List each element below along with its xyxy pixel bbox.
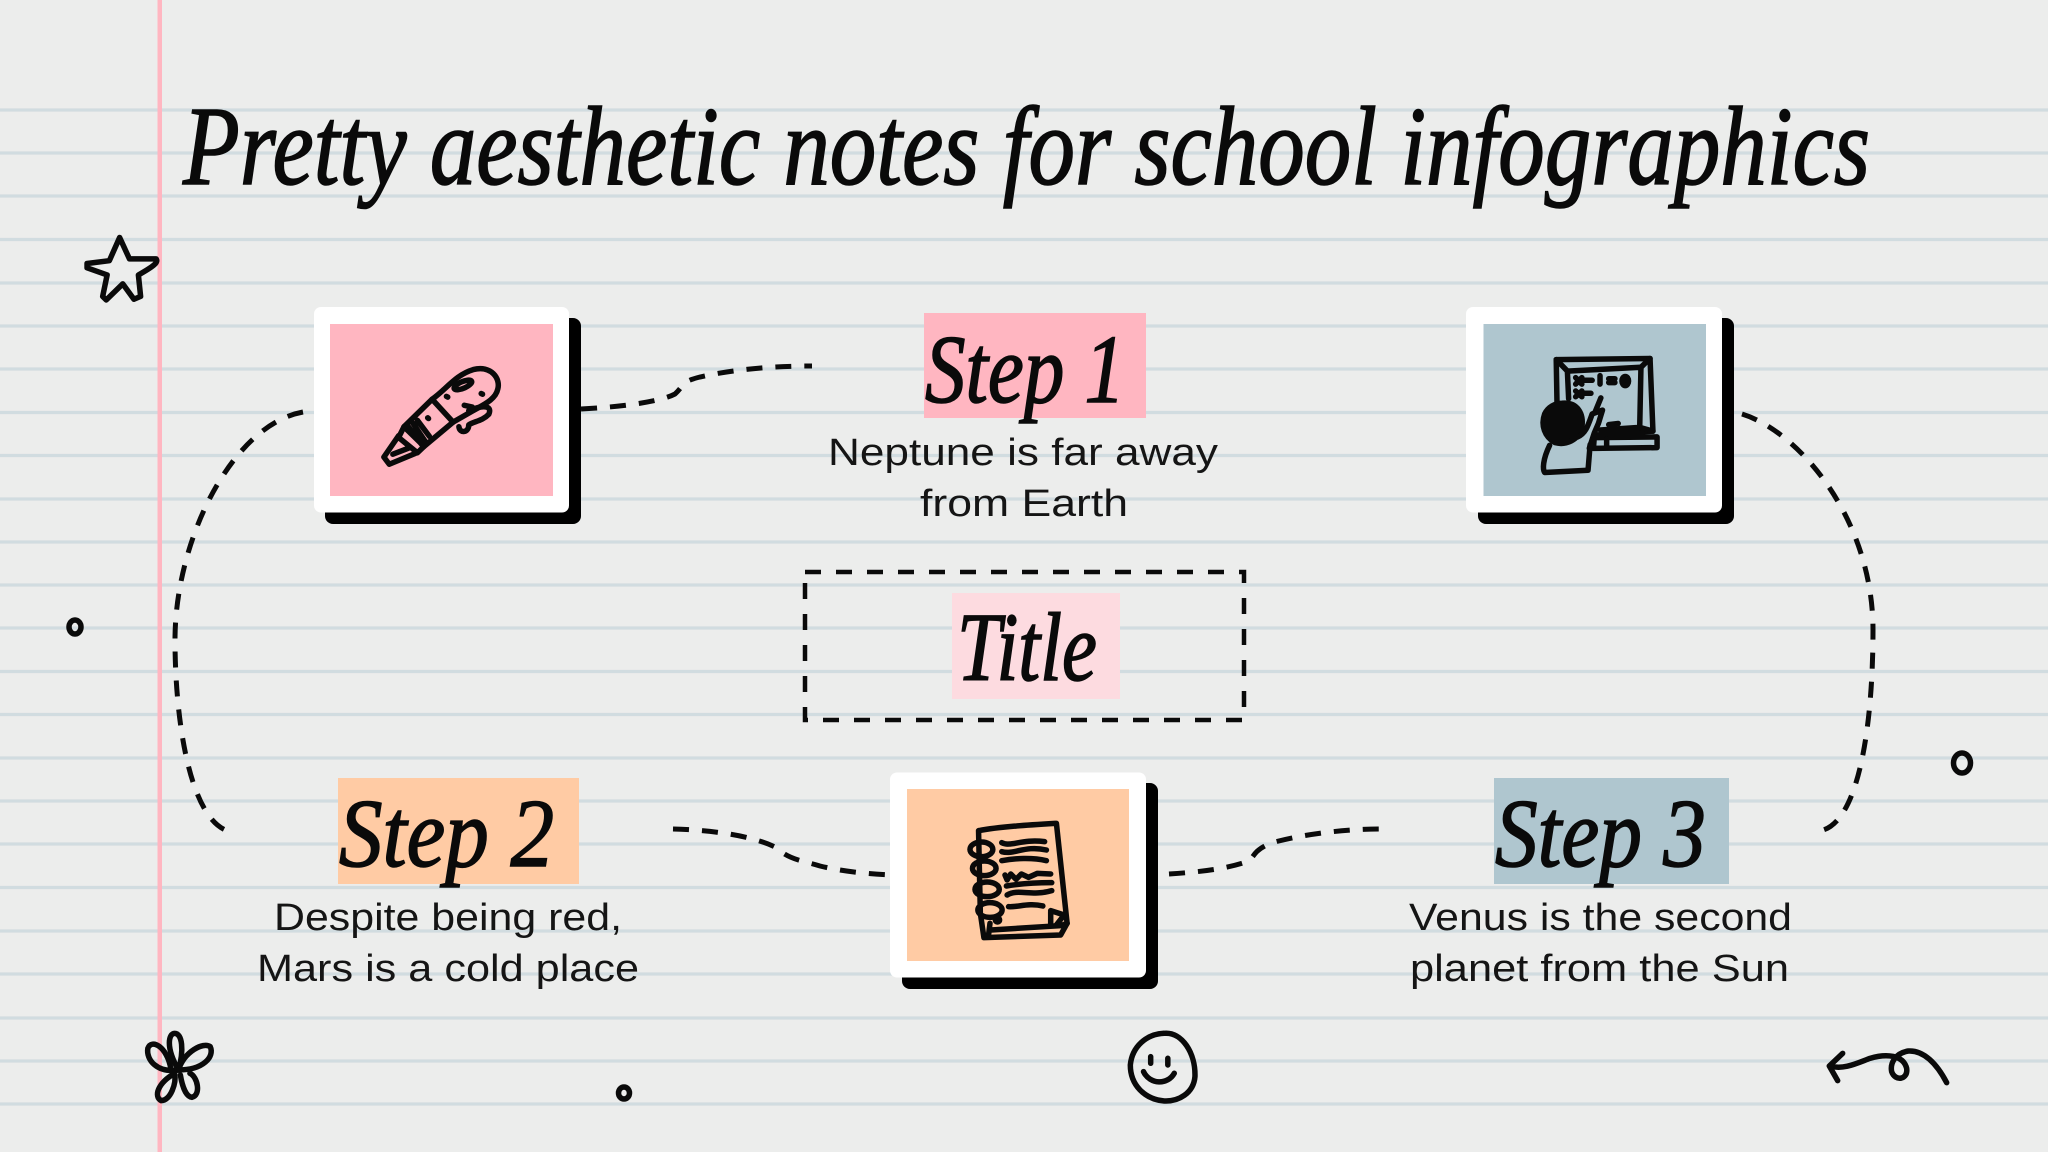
- connector: step 2: [673, 829, 892, 875]
- doodle: bottom circle: [618, 1087, 630, 1099]
- connector: left arc: [175, 412, 303, 832]
- step 2 heading: Step 2: [339, 780, 554, 888]
- center title box: [805, 572, 1244, 720]
- step 1 description: [828, 432, 1218, 525]
- step 1 block: [828, 313, 1218, 525]
- step 2 description: Mars is a cold place: [257, 948, 639, 990]
- step 3 heading: Step 3: [1495, 780, 1706, 888]
- icon: teacher at blackboard: [1543, 358, 1657, 472]
- doodle: smiley: [1130, 1033, 1195, 1101]
- connector: right arc: [1742, 414, 1873, 831]
- step 2 description: Despite being red,: [274, 897, 622, 939]
- card: notebook: [890, 772, 1158, 989]
- step 2 block: [257, 778, 639, 990]
- step 3 description: Venus is the second: [1409, 897, 1792, 939]
- step 1 description: Neptune is far away: [828, 432, 1218, 474]
- icon: notebook: [970, 823, 1067, 938]
- doodle: left circle: [69, 620, 81, 634]
- icon: highlighter: [384, 369, 498, 464]
- doodle: flower: [148, 1033, 211, 1101]
- connector: step 3: [1169, 829, 1382, 874]
- step 1 heading: Step 1: [925, 316, 1125, 424]
- card: highlighter: [314, 307, 581, 524]
- step 2 description: [257, 897, 639, 990]
- card: teacher at blackboard: [1466, 307, 1734, 524]
- doodle: right circle: [1954, 753, 1970, 773]
- step 3 description: [1409, 897, 1792, 990]
- doodle: curly arrow: [1829, 1051, 1947, 1083]
- center title text: Title: [957, 594, 1097, 702]
- connector: step 1: [581, 366, 812, 409]
- doodle: star: [87, 237, 157, 300]
- step 3 block: [1409, 778, 1792, 990]
- step 1 description: from Earth: [920, 483, 1128, 525]
- step 3 description: planet from the Sun: [1410, 948, 1789, 990]
